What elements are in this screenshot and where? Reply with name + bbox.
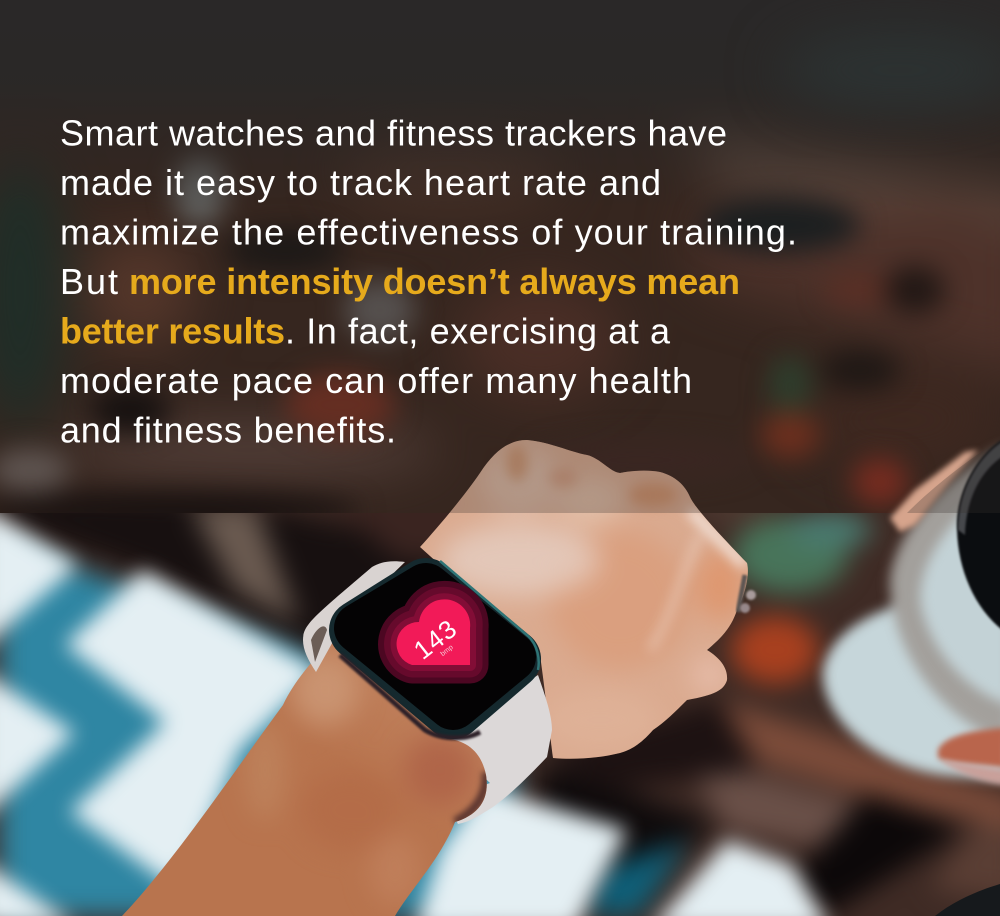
watch strap upper — [303, 561, 405, 672]
blurred background scene — [0, 513, 1000, 916]
watch screen — [359, 588, 511, 705]
haze band over hand and cup above the edge — [450, 440, 1000, 513]
cup coffee — [957, 438, 1000, 632]
cup and saucer held in other hand — [823, 438, 1000, 785]
intro paragraph: more intensity doesn’t always mean — [129, 261, 740, 302]
intro paragraph — [60, 112, 797, 450]
intro paragraph: and fitness benefits. — [60, 410, 396, 450]
heart rate reading: 143 — [408, 613, 463, 665]
case lower lip — [340, 655, 480, 738]
heart rate reading: bmp — [440, 644, 455, 658]
fingers — [890, 450, 978, 532]
saucer — [823, 590, 1000, 780]
intro paragraph: moderate pace can offer many health — [60, 360, 692, 401]
case highlight edge — [440, 561, 539, 670]
dark clothing corner — [935, 884, 1000, 916]
heart rate reading — [415, 621, 456, 660]
raised hand — [410, 430, 760, 770]
intro paragraph: But — [60, 261, 118, 302]
intro paragraph: made it easy to track heart rate and — [60, 162, 661, 203]
smart watch — [303, 561, 539, 738]
forearm — [122, 643, 487, 916]
intro paragraph: . In fact, exercising at a — [285, 310, 671, 352]
heart display — [397, 599, 470, 669]
lower watch strap — [443, 675, 552, 824]
ring — [738, 575, 756, 613]
intro paragraph: Smart watches and fitness trackers have — [60, 112, 727, 154]
intro paragraph: better results — [60, 310, 285, 352]
blue and white zigzag floor — [0, 505, 830, 916]
cup body — [890, 445, 1000, 745]
mottled blurred background behind text — [0, 0, 1000, 528]
intro paragraph: maximize the effectiveness of your training. — [60, 212, 797, 252]
watch case — [359, 588, 511, 709]
